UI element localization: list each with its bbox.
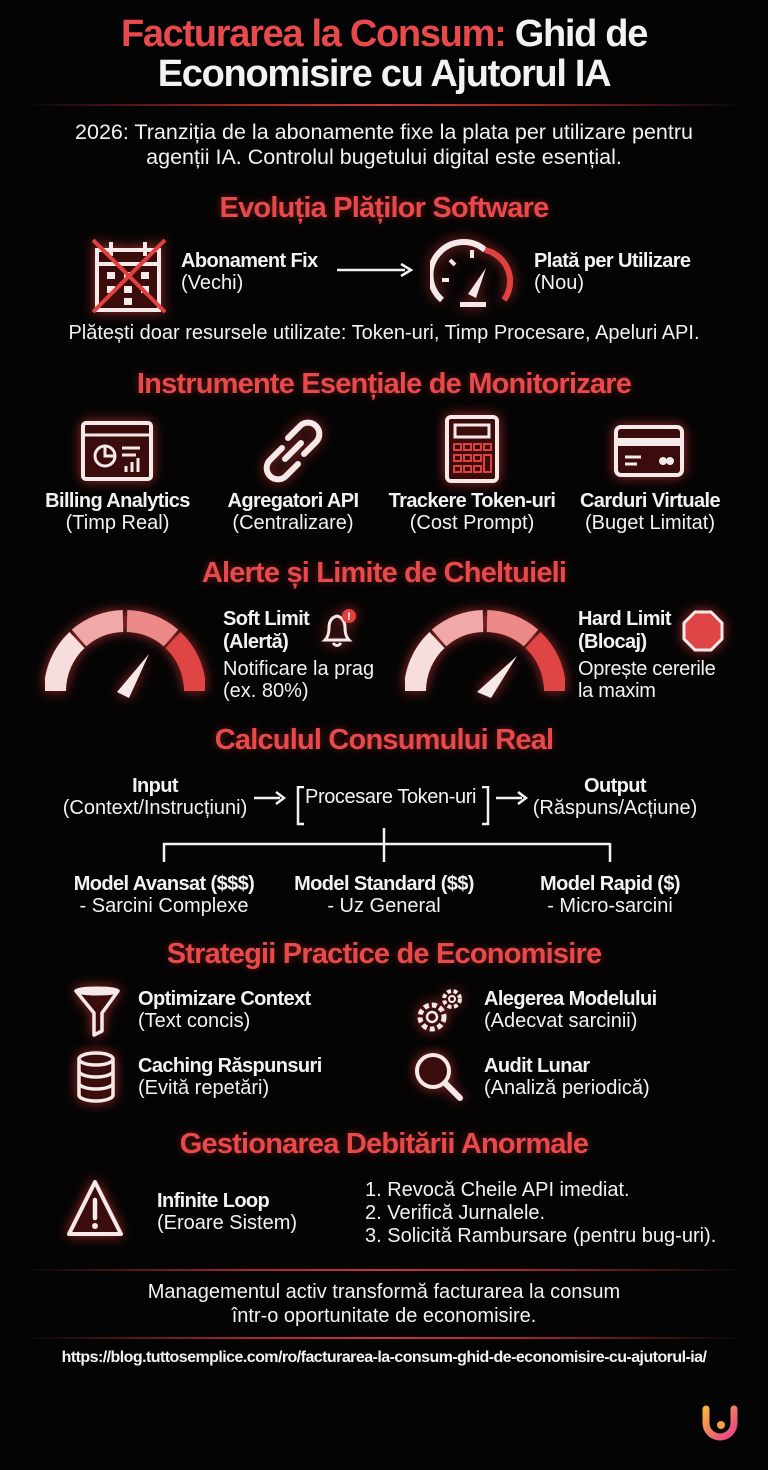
arrow	[337, 262, 414, 278]
flow diagram: - Micro-sarcini	[547, 895, 673, 917]
text: abonament fix	[181, 250, 318, 294]
icon: magnifier	[407, 1045, 469, 1107]
intro text: agenții IA. Controlul bugetului digital este esențial.	[146, 145, 622, 169]
flow diagram: (Răspuns/Acțiune)	[533, 797, 697, 819]
flow diagram: - Sarcini Complexe	[80, 895, 248, 917]
icon: database	[68, 1042, 124, 1112]
flow diagram: Procesare Token-uri	[305, 786, 476, 808]
tool: billing analytics	[45, 412, 190, 534]
panel: hard limit: la maxim	[578, 680, 656, 702]
icon: funnel	[68, 978, 126, 1043]
heading: strategies: Strategii Practice de Economisire	[167, 938, 601, 970]
flow diagram: - Uz General	[327, 895, 441, 917]
intro text: 2026: Tranziția de la abonamente fixe la plata per utilizare pentru	[75, 120, 693, 144]
icon: stop sign	[674, 602, 732, 660]
text: resources: Plătești doar resursele utilizate: Token-uri, Timp Procesare, Apeluri API.	[68, 322, 700, 344]
panel: strategies: (Analiză periodică)	[484, 1077, 650, 1099]
icon: crossed calendar	[86, 234, 172, 321]
title: Economisire cu Ajutorul IA	[158, 53, 610, 95]
panel: strategies: Optimizare Context	[138, 988, 311, 1010]
tool: virtual cards	[580, 416, 720, 534]
tool: token trackers: (Cost Prompt)	[410, 512, 534, 534]
icon: gauge hard	[396, 602, 574, 704]
panel: anomalies: 2. Verifică Jurnalele.	[365, 1202, 545, 1224]
url: https://blog.tuttosemplice.com/ro/facturarea-la-consum-ghid-de-economisire-cu-ajutorul-ia/	[62, 1349, 706, 1366]
panel: soft limit	[36, 602, 374, 704]
tool: billing analytics: Billing Analytics	[45, 490, 190, 512]
flow diagram: Input	[132, 775, 178, 797]
panel: strategies	[68, 978, 657, 1112]
panel: hard limit: Hard Limit	[578, 608, 671, 630]
panel: strategies: (Text concis)	[138, 1010, 250, 1032]
icon: warning	[60, 1174, 130, 1245]
panel: strategies: Audit Lunar	[484, 1055, 590, 1077]
panel: strategies: (Adecvat sarcinii)	[484, 1010, 637, 1032]
tool: virtual cards: Carduri Virtuale	[580, 490, 720, 512]
heading: alerts: Alerte și Limite de Cheltuieli	[202, 557, 566, 589]
panel: anomalies: Infinite Loop	[157, 1190, 269, 1212]
heading: real consumption: Calculul Consumului Real	[215, 724, 553, 756]
panel: soft limit: Soft Limit	[223, 608, 309, 630]
panel: strategies: (Evită repetări)	[138, 1077, 269, 1099]
tool: billing analytics: (Timp Real)	[66, 512, 169, 534]
panel: strategies: Caching Răspunsuri	[138, 1055, 322, 1077]
flow diagram: Model Rapid ($)	[540, 873, 680, 895]
flow diagram: Output	[584, 775, 646, 797]
text: abonament fix: (Vechi)	[181, 272, 243, 294]
flow diagram	[63, 775, 697, 917]
closing text	[148, 1281, 620, 1327]
icon: bell	[318, 602, 363, 653]
tool: api aggregators: (Centralizare)	[232, 512, 354, 534]
panel: hard limit: (Blocaj)	[578, 631, 647, 653]
icon: gauge soft	[36, 602, 214, 704]
title: Facturarea la Consum: Ghid de	[121, 13, 647, 55]
icon: bell: !	[347, 611, 351, 623]
panel: soft limit: (Alertă)	[223, 631, 288, 653]
logo	[702, 1406, 738, 1440]
closing text: Managementul activ transformă facturarea la consum	[148, 1281, 620, 1303]
heading: anomalies: Gestionarea Debitării Anormale	[180, 1128, 588, 1160]
text: plata per utilizare	[534, 250, 690, 294]
panel: hard limit: Oprește cererile	[578, 658, 715, 680]
panel: soft limit: (ex. 80%)	[223, 680, 309, 702]
icon: gears	[410, 984, 468, 1038]
text: plata per utilizare: (Nou)	[534, 272, 584, 294]
intro text	[75, 120, 693, 169]
text: abonament fix: Abonament Fix	[181, 250, 318, 272]
heading: evolution: Evoluția Plăților Software	[220, 192, 548, 224]
panel: tools	[45, 406, 720, 534]
tool: virtual cards: (Buget Limitat)	[585, 512, 715, 534]
panel: strategies: Alegerea Modelului	[484, 988, 657, 1010]
panel: anomalies	[60, 1174, 716, 1247]
tool: api aggregators	[228, 412, 358, 534]
heading: monitoring tools: Instrumente Esențiale de Monitorizare	[137, 368, 631, 400]
panel: hard limit	[396, 602, 732, 704]
flow diagram: Model Avansat ($$$)	[74, 873, 254, 895]
title	[121, 13, 648, 95]
closing text: într-o oportunitate de economisire.	[232, 1305, 536, 1327]
panel: anomalies: 3. Solicită Rambursare (pentru bug-uri).	[365, 1225, 716, 1247]
tool: token trackers	[388, 406, 555, 534]
panel: soft limit: Notificare la prag	[223, 658, 374, 680]
tool: api aggregators: Agregatori API	[228, 490, 358, 512]
tool: token trackers: Trackere Token-uri	[389, 490, 555, 512]
panel: anomalies: 1. Revocă Cheile API imediat.	[365, 1179, 630, 1201]
flow diagram: (Context/Instrucțiuni)	[63, 797, 247, 819]
flow diagram: Model Standard ($$)	[294, 873, 474, 895]
icon: speedometer	[422, 230, 522, 316]
panel: evolution	[86, 230, 690, 321]
text: plata per utilizare: Plată per Utilizare	[534, 250, 690, 272]
panel: anomalies: (Eroare Sistem)	[157, 1212, 297, 1234]
